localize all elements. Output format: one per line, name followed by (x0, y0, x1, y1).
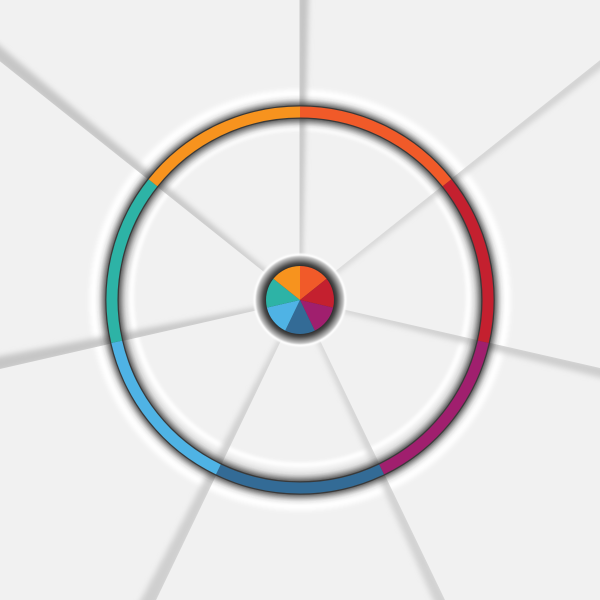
wedge: red orange (300, 266, 327, 300)
segment: crimson (447, 183, 488, 342)
segment: teal (112, 183, 153, 342)
segment: sky blue (117, 342, 218, 469)
segment: red orange (300, 112, 447, 183)
spoke: upper left (0, 43, 266, 272)
spoke: upper right (336, 60, 600, 274)
centre hub shadow and highlight (254, 254, 346, 346)
wedge: teal (266, 279, 300, 308)
segment: navy blue (218, 469, 382, 488)
ring outline (112, 112, 488, 488)
wedge: navy blue (285, 300, 315, 334)
wedge: crimson (300, 279, 334, 308)
segment: magenta (382, 342, 483, 469)
ring shadow (112, 112, 488, 488)
spoke: right (344, 310, 600, 380)
spoke: top (300, 0, 311, 254)
spoke: lower left (139, 340, 280, 600)
ring groove highlight (101, 101, 499, 499)
pie outline (265, 265, 335, 335)
spoke: lower right (317, 342, 445, 600)
segmented ring (112, 112, 488, 488)
spoke: left (0, 306, 255, 369)
centre pie (265, 265, 335, 335)
wedge: sky blue (267, 300, 300, 331)
wedge: orange (273, 266, 300, 300)
wedge: magenta (300, 300, 333, 331)
segment: orange (153, 112, 300, 183)
